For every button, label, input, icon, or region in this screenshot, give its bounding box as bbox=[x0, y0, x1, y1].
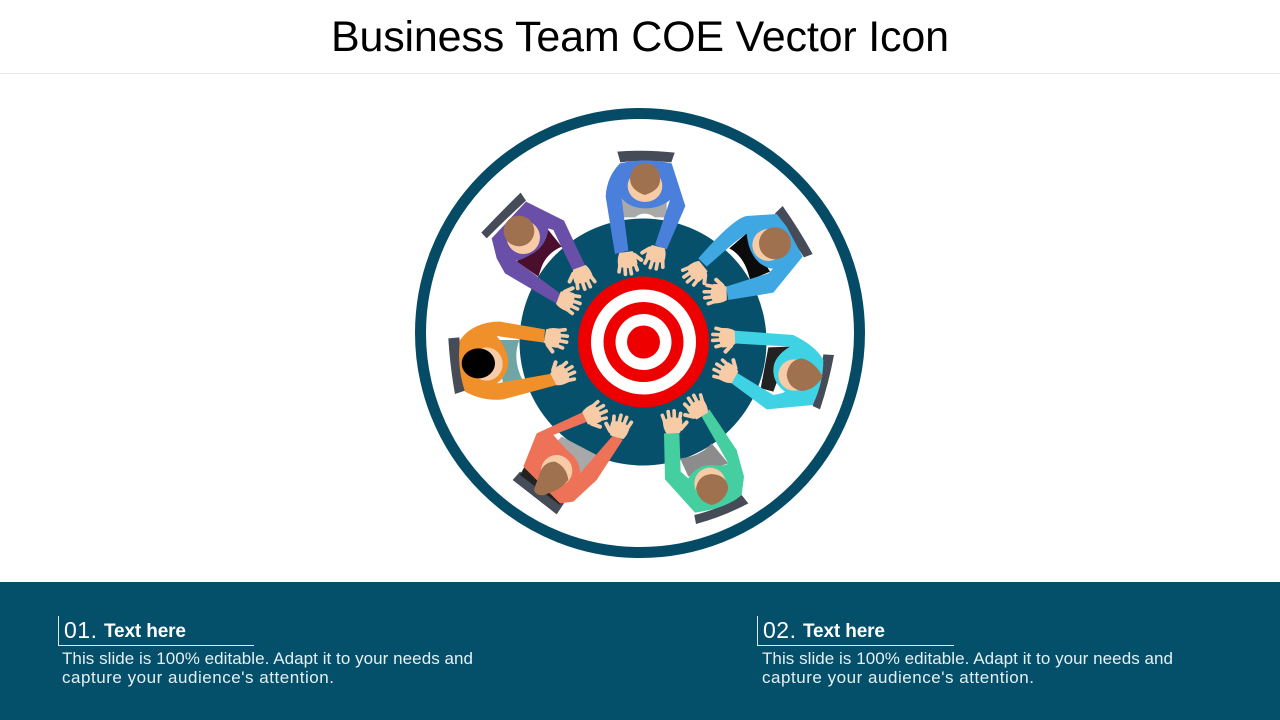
body text bbox=[62, 649, 473, 687]
face bbox=[471, 347, 503, 381]
hair bbox=[630, 163, 660, 195]
face bbox=[507, 221, 540, 254]
upper hand bbox=[543, 326, 569, 354]
chair bbox=[694, 495, 748, 524]
hair bbox=[696, 474, 728, 505]
chair bbox=[775, 206, 813, 257]
chair bbox=[813, 354, 834, 409]
right hand bbox=[639, 243, 668, 271]
hair bbox=[759, 227, 791, 259]
body text bbox=[762, 649, 1173, 687]
heading text: Text here bbox=[803, 621, 885, 642]
text block 01 bbox=[58, 616, 473, 687]
body text: capture your audience's attention. bbox=[62, 668, 334, 687]
body text: This slide is 100% editable. Adapt it to your needs and bbox=[62, 649, 473, 668]
shirt bbox=[698, 214, 803, 300]
chair bbox=[617, 151, 675, 162]
person: cyan, right bbox=[711, 328, 834, 409]
left hand bbox=[662, 410, 687, 434]
shirt bbox=[606, 160, 685, 254]
person: green, lower right bbox=[662, 392, 748, 524]
undershirt bbox=[517, 230, 562, 277]
person: blue, top bbox=[606, 151, 685, 275]
left hand bbox=[680, 258, 712, 291]
lower hand bbox=[711, 354, 742, 386]
face bbox=[628, 170, 662, 202]
chair bbox=[481, 193, 526, 238]
shirt bbox=[523, 412, 623, 503]
person: coral, lower left bbox=[513, 400, 632, 514]
lower hand bbox=[603, 412, 632, 440]
outer ring bbox=[420, 114, 860, 552]
upper hand bbox=[712, 328, 735, 352]
person: orange, left bbox=[448, 322, 578, 400]
undershirt bbox=[495, 340, 523, 385]
chair bbox=[513, 472, 564, 514]
chair back bbox=[520, 464, 565, 505]
shirt bbox=[459, 322, 557, 400]
text block 02 bbox=[758, 616, 1173, 687]
body text: capture your audience's attention. bbox=[762, 668, 1034, 687]
shirt bbox=[492, 202, 585, 303]
undershirt bbox=[729, 233, 770, 280]
title: Business Team COE Vector Icon bbox=[331, 13, 949, 61]
upper hand bbox=[581, 400, 611, 431]
shirt bbox=[664, 409, 744, 513]
undershirt bbox=[550, 437, 597, 478]
footer band bbox=[0, 582, 1280, 720]
face bbox=[694, 468, 726, 499]
number 02: 02. bbox=[763, 617, 796, 643]
round table bbox=[520, 218, 766, 466]
right hand bbox=[679, 392, 711, 423]
shirt bbox=[729, 331, 823, 409]
person: light blue, upper right bbox=[680, 206, 813, 304]
hair bbox=[534, 462, 568, 495]
left hand bbox=[555, 285, 584, 315]
target bullseye bbox=[578, 276, 709, 408]
face bbox=[752, 229, 784, 261]
person: purple, upper left bbox=[481, 193, 596, 315]
body text: This slide is 100% editable. Adapt it to your needs and bbox=[762, 649, 1173, 668]
hair bbox=[504, 216, 534, 246]
face bbox=[541, 455, 572, 486]
right hand bbox=[566, 264, 596, 293]
left hand bbox=[616, 250, 643, 275]
lower hand bbox=[547, 356, 578, 388]
hair bbox=[787, 358, 823, 391]
heading marker bbox=[58, 616, 254, 646]
header band bbox=[0, 0, 1280, 74]
number 01: 01. bbox=[64, 617, 97, 643]
face bbox=[778, 359, 810, 391]
heading marker bbox=[758, 616, 954, 646]
chair bbox=[448, 337, 465, 394]
undershirt bbox=[761, 347, 790, 392]
undershirt bbox=[680, 443, 728, 477]
right hand bbox=[704, 279, 727, 304]
hair bbox=[462, 348, 495, 378]
undershirt bbox=[622, 198, 667, 217]
heading text: Text here bbox=[104, 621, 186, 642]
